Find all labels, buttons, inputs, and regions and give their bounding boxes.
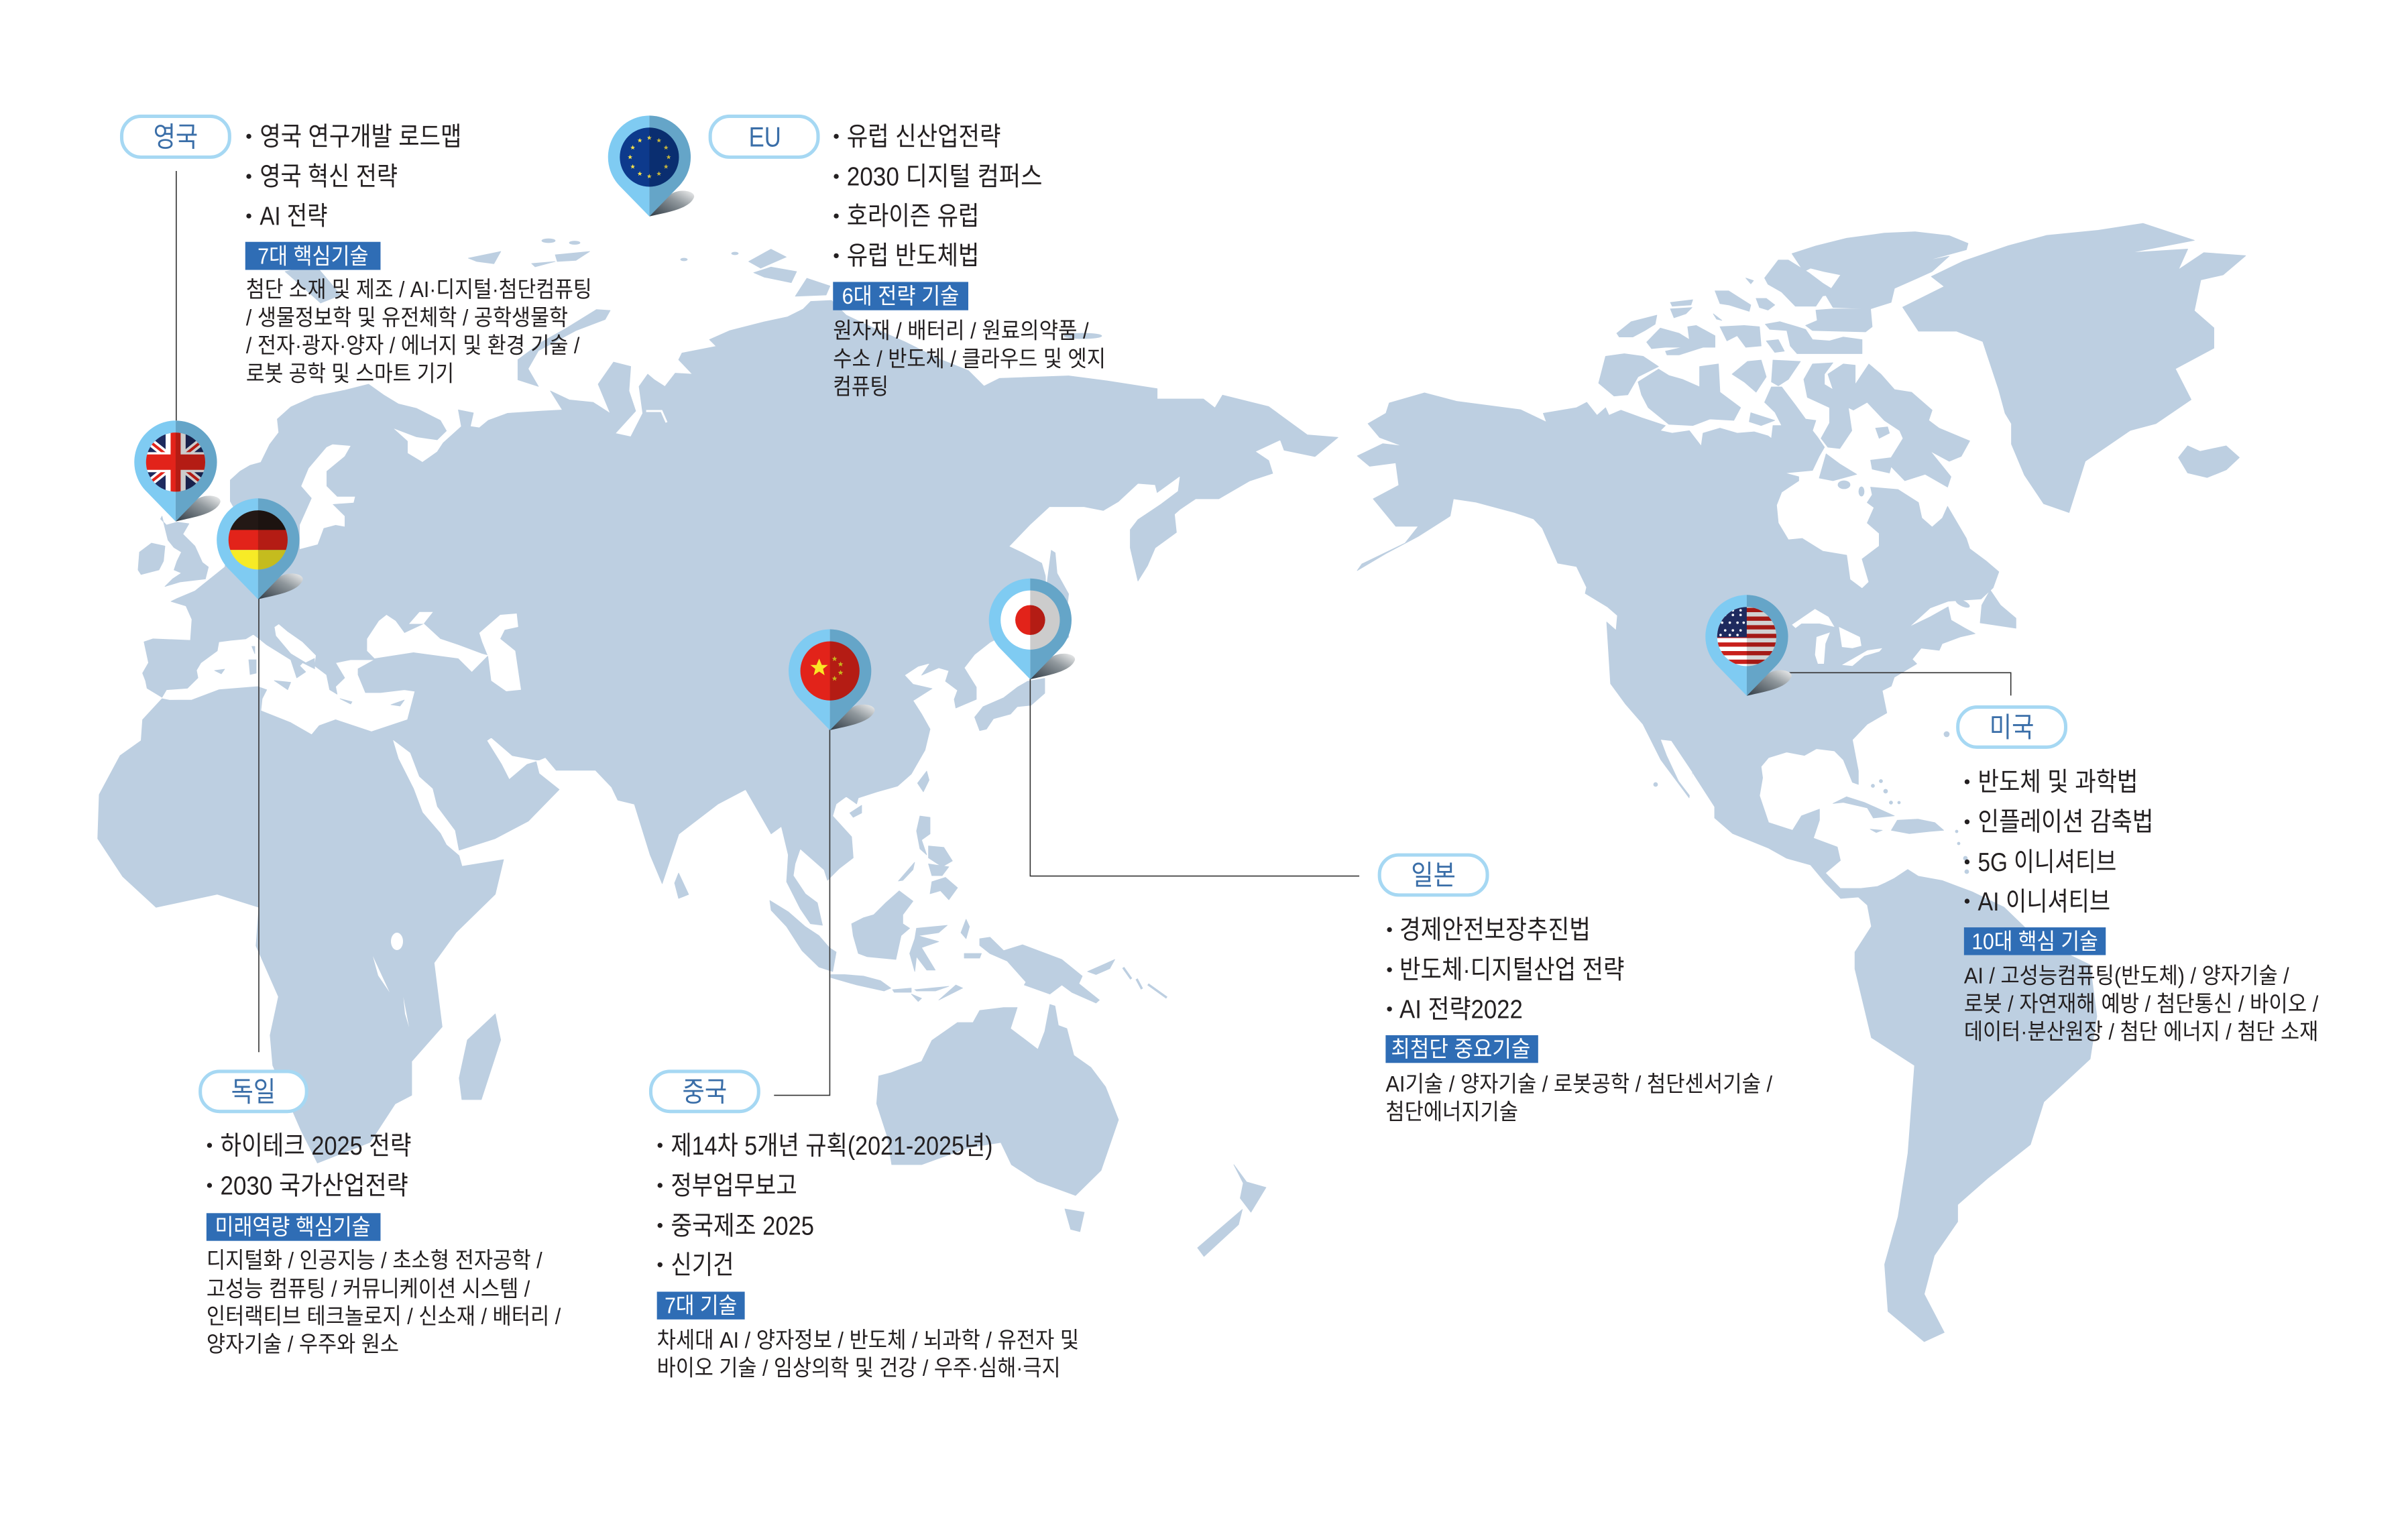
pin: Japan flag	[989, 579, 1075, 679]
island: Iceland	[2179, 446, 2239, 477]
islands: Taiwan and Hainan	[850, 771, 929, 817]
label: China pill	[650, 1071, 758, 1112]
sea: Caspian	[479, 614, 521, 691]
tag: 6 strategic technologies: 6대 전략 기술	[842, 284, 959, 309]
label: Germany pill	[200, 1071, 306, 1112]
text: EU technologies: 컴퓨팅	[833, 375, 888, 400]
connector: Germany	[258, 597, 260, 1052]
islands: Canadian Arctic	[1599, 232, 1969, 496]
text: China technologies: 차세대 AI / 양자정보 / 반도체 / 뇌과학 / 유전자 및	[657, 1328, 1079, 1353]
tag: 10 core technologies: 10대 핵심 기술	[1971, 929, 2098, 954]
tag: cutting-edge technologies: 최첨단 중요기술	[1391, 1037, 1530, 1062]
text: Germany technologies	[207, 1248, 561, 1357]
sea: Black Sea	[367, 612, 488, 672]
list: EU strategies: 유럽 반도체법	[847, 242, 979, 271]
connector: China	[774, 729, 829, 1096]
landmass: Australia	[876, 1004, 1119, 1195]
islands: Britain and Ireland	[138, 516, 209, 587]
text: UK technologies: / 생물정보학 및 유전체학 / 공학생물학	[246, 306, 568, 331]
islands: Mediterranean	[215, 646, 404, 706]
label: Japan pill	[1379, 855, 1487, 895]
islands: Japan and Sakhalin	[974, 550, 1069, 731]
panel: Germany	[200, 1071, 561, 1357]
panel: Japan	[1379, 855, 1773, 1125]
text: China technologies	[657, 1328, 1079, 1381]
island: Sri Lanka	[675, 873, 689, 898]
text: Germany technologies: 고성능 컴퓨팅 / 커뮤니케이션 시스템 /	[207, 1277, 530, 1301]
connector: UK	[176, 171, 177, 420]
list: UK strategies	[246, 123, 461, 231]
text: EU technologies: 수소 / 반도체 / 클라우드 및 엣지	[833, 347, 1106, 371]
label: EU pill	[710, 116, 818, 157]
panel: EU	[710, 116, 1106, 400]
Gulf of California	[1661, 740, 1693, 797]
lakes: Africa	[373, 933, 409, 1027]
list: USA strategies: 반도체 및 과학법	[1978, 768, 2138, 797]
text: UK technologies: 첨단 소재 및 제조 / AI·디지털·첨단컴퓨팅	[246, 278, 592, 302]
list: Japan strategies	[1387, 916, 1624, 1025]
text: USA technologies: 데이터·분산원장 / 첨단 에너지 / 첨단 소재	[1964, 1020, 2318, 1045]
text: UK technologies: 로봇 공학 및 스마트 기기	[246, 361, 454, 386]
list: USA strategies	[1965, 768, 2153, 917]
label: EU pill: EU	[749, 121, 781, 152]
landmass: North and South America	[1357, 387, 2097, 1342]
connector: Japan	[1030, 678, 1359, 876]
label: UK pill: 영국	[154, 121, 198, 152]
text: Japan technologies	[1385, 1072, 1773, 1125]
list: UK strategies: 영국 연구개발 로드맵	[260, 123, 461, 152]
island: Tasmania	[1065, 1209, 1084, 1232]
list: EU strategies: 2030 디지털 컴퍼스	[847, 162, 1042, 191]
label: USA pill	[1958, 707, 2065, 747]
pin: China flag	[789, 630, 874, 730]
Greenland and Iceland	[1902, 223, 2246, 512]
text: Japan technologies: AI기술 / 양자기술 / 로봇공학 / 첨단센서기술 /	[1385, 1072, 1773, 1097]
pin: EU flag	[608, 115, 694, 217]
text: UK technologies	[246, 278, 592, 386]
pin: USA flag	[1705, 595, 1792, 696]
list: USA strategies: 인플레이션 감축법	[1978, 808, 2153, 837]
pin: Germany flag	[217, 498, 303, 599]
text: USA technologies	[1964, 964, 2319, 1045]
text: EU technologies: 원자재 / 배터리 / 원료의약품 /	[833, 319, 1089, 344]
text: Germany technologies: 양자기술 / 우주와 원소	[207, 1332, 399, 1357]
label: Japan pill: 일본	[1411, 860, 1456, 890]
tag: future capability technologies: 미래역량 핵심기술	[215, 1215, 371, 1240]
list: China strategies: 중국제조 2025	[671, 1212, 814, 1240]
text: China technologies: 바이오 기술 / 임상의학 및 건강 / 우주·심해·극지	[657, 1356, 1061, 1381]
panel: UK	[122, 116, 592, 386]
islands: New Zealand	[1198, 1165, 1266, 1257]
list: USA strategies: AI 이니셔티브	[1978, 888, 2110, 917]
inland seas and lakes	[300, 411, 1882, 1027]
list: UK strategies: 영국 혁신 전략	[260, 162, 398, 191]
list: China strategies: 정부업무보고	[671, 1172, 797, 1201]
list: China strategies: 신기건	[671, 1251, 734, 1280]
label: China pill: 중국	[683, 1076, 727, 1107]
tag: 7 technologies: 7대 기술	[665, 1294, 737, 1319]
label: USA pill: 미국	[1990, 712, 2034, 743]
panel: USA	[1958, 707, 2319, 1045]
list: China strategies	[658, 1132, 993, 1280]
islands: Caribbean	[1654, 780, 1969, 874]
label: Germany pill: 독일	[231, 1076, 276, 1107]
list: Germany strategies: 2030 국가산업전략	[221, 1172, 408, 1201]
connector: USA	[1771, 673, 2011, 695]
tag: 7 core technologies: 7대 핵심기술	[257, 244, 369, 269]
list: China strategies: 제14차 5개년 규획(2021-2025년)	[671, 1132, 993, 1161]
text: USA technologies: 로봇 / 자연재해 예방 / 첨단통신 / 바이오 /	[1964, 992, 2319, 1016]
list: USA strategies: 5G 이니셔티브	[1978, 848, 2116, 877]
islands: Indonesia and New Guinea	[770, 891, 1167, 1003]
list: Germany strategies	[207, 1132, 411, 1201]
list: Japan strategies: 반도체·디지털산업 전략	[1399, 956, 1624, 985]
landmass: Eurasia and Africa	[98, 300, 1338, 1163]
islands: Philippines	[899, 816, 958, 900]
label: UK pill	[122, 116, 229, 157]
panel: China	[650, 1071, 1079, 1381]
list: EU strategies: 호라이즌 유럽	[847, 202, 979, 231]
island: Madagascar	[459, 1014, 501, 1100]
world map	[98, 232, 2097, 1342]
island: Greenland	[1902, 223, 2246, 512]
text: UK technologies: / 전자·광자·양자 / 에너지 및 환경 기술 /	[246, 334, 580, 359]
lakes: Great Lakes	[1792, 609, 1882, 666]
sea: Baltic	[300, 445, 355, 549]
list: Japan strategies: AI 전략2022	[1399, 996, 1523, 1025]
text: Japan technologies: 첨단에너지기술	[1385, 1100, 1518, 1125]
list: Germany strategies: 하이테크 2025 전략	[221, 1132, 411, 1161]
text: USA technologies: AI / 고성능컴퓨팅(반도체) / 양자기술 /	[1964, 964, 2289, 989]
pin: UK flag	[134, 420, 221, 522]
list: UK strategies: AI 전략	[260, 202, 327, 231]
river: Yenisei gulf	[646, 411, 667, 422]
list: EU strategies: 유럽 신산업전략	[847, 123, 1000, 152]
text: Germany technologies: 디지털화 / 인공지능 / 초소형 전자공학 /	[207, 1248, 542, 1273]
list: EU strategies	[834, 123, 1042, 271]
text: Germany technologies: 인터랙티브 테크놀로지 / 신소재 / 배터리 /	[207, 1305, 561, 1330]
islands: Atlantic Canada	[1944, 590, 2016, 737]
list: Japan strategies: 경제안전보장추진법	[1399, 916, 1591, 945]
islands: Arctic Eurasia	[285, 239, 1102, 386]
text: EU technologies	[833, 319, 1106, 400]
